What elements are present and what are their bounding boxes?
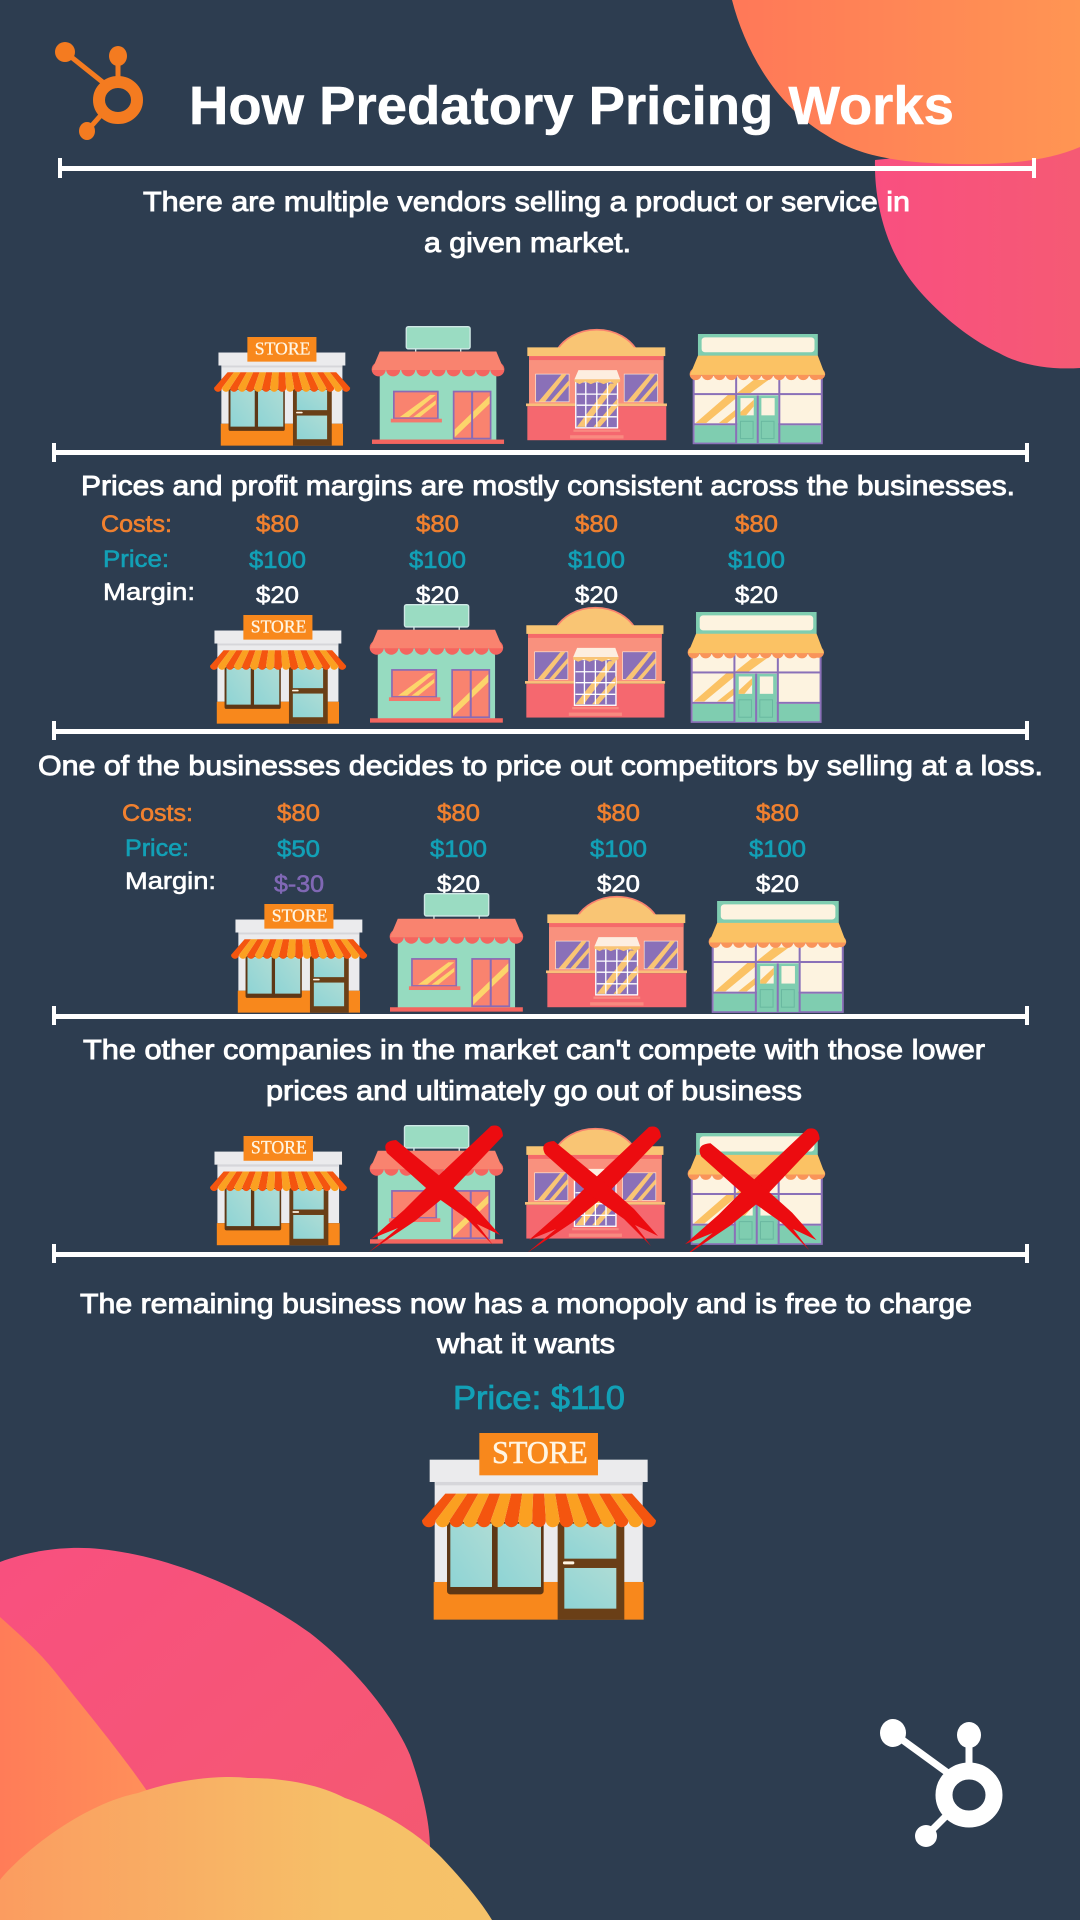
price row: Price:	[125, 835, 189, 862]
costs row: Costs:	[122, 800, 193, 827]
divider 5	[52, 1244, 1029, 1263]
store: orange	[210, 1136, 347, 1245]
store: orange	[210, 615, 346, 724]
icon: orange HubSpot logo	[55, 42, 137, 140]
price row: $100	[749, 836, 806, 863]
store: yellow	[709, 901, 846, 1012]
price row: $100	[590, 836, 647, 863]
store: teal	[390, 894, 523, 1012]
title: How Predatory Pricing Works	[189, 76, 954, 136]
store: teal	[370, 605, 503, 723]
price row: $100	[568, 547, 625, 574]
store: yellow	[688, 612, 824, 722]
store: pink crossed out	[525, 1126, 665, 1253]
step 3 stores	[231, 894, 846, 1013]
step 3 pricing table	[122, 800, 806, 898]
step 1 stores	[214, 327, 825, 446]
store: yellow crossed out	[683, 1128, 825, 1258]
price row: $100	[430, 836, 487, 863]
step 5 text	[80, 1288, 972, 1359]
margin row	[103, 579, 778, 609]
costs row: $80	[575, 511, 618, 538]
price row: $100	[409, 547, 466, 574]
divider 1	[58, 158, 1036, 178]
costs row: $80	[277, 800, 320, 827]
price row	[103, 546, 785, 574]
margin row: $20	[416, 582, 459, 609]
price row: $50	[277, 836, 320, 863]
store: orange	[214, 337, 350, 446]
store: orange: STORE	[272, 905, 327, 925]
margin row: Margin:	[103, 579, 195, 606]
margin row: $20	[575, 582, 618, 609]
store: orange: STORE	[251, 1138, 307, 1159]
price row: $100	[249, 547, 306, 574]
step 5 text: what it wants	[436, 1328, 615, 1359]
costs row	[101, 511, 778, 538]
step 2 stores	[210, 605, 824, 724]
large store	[422, 1433, 656, 1620]
costs row: $80	[735, 511, 778, 538]
price row	[125, 835, 806, 863]
divider 2	[52, 443, 1029, 462]
large store: STORE	[492, 1435, 588, 1470]
decorative blobs: bottom left	[0, 1548, 492, 1920]
store: teal	[372, 327, 504, 444]
store: pink	[525, 608, 665, 718]
icon: white HubSpot logo	[880, 1719, 994, 1847]
step 2 text: Prices and profit margins are mostly consistent across the businesses.	[81, 470, 1015, 501]
store: orange	[231, 904, 367, 1013]
monopoly price: Price: $110	[453, 1379, 625, 1416]
store: yellow	[690, 334, 825, 443]
margin row: Margin:	[125, 868, 216, 895]
margin row: $20	[756, 871, 799, 898]
costs row: $80	[256, 511, 299, 538]
step 1 text: a given market.	[424, 227, 631, 258]
step 3 text: One of the businesses decides to price out competitors by selling at a loss.	[38, 750, 1043, 781]
margin row	[125, 868, 799, 898]
margin row: $20	[597, 871, 640, 898]
costs row	[122, 800, 799, 827]
margin row: $20	[256, 582, 299, 609]
costs row: $80	[437, 800, 480, 827]
divider 4	[52, 1006, 1029, 1025]
store: orange: STORE	[251, 616, 306, 636]
divider 3	[52, 721, 1029, 740]
step 4 text: The other companies in the market can't compete with those lower	[83, 1034, 985, 1065]
step 4 stores	[210, 1125, 825, 1258]
store: teal crossed out	[369, 1125, 503, 1252]
price row: $100	[728, 547, 785, 574]
margin row: $20	[735, 582, 778, 609]
store: pink	[526, 330, 667, 440]
store: orange: STORE	[255, 338, 310, 358]
step 4 text	[83, 1034, 985, 1106]
costs row: $80	[597, 800, 640, 827]
decorative blobs: top right	[732, 0, 1080, 368]
step 1 text: There are multiple vendors selling a product or service in	[143, 186, 910, 217]
price row: Price:	[103, 546, 169, 573]
step 4 text: prices and ultimately go out of business	[266, 1075, 802, 1106]
costs row: $80	[416, 511, 459, 538]
step 2 pricing table	[101, 511, 785, 609]
costs row: Costs:	[101, 511, 172, 538]
margin row: $20	[437, 871, 480, 898]
store: pink	[546, 897, 687, 1007]
costs row: $80	[756, 800, 799, 827]
margin row: $-30	[274, 871, 324, 898]
step 5 text: The remaining business now has a monopoly and is free to charge	[80, 1288, 972, 1319]
step 1 text	[143, 186, 910, 258]
